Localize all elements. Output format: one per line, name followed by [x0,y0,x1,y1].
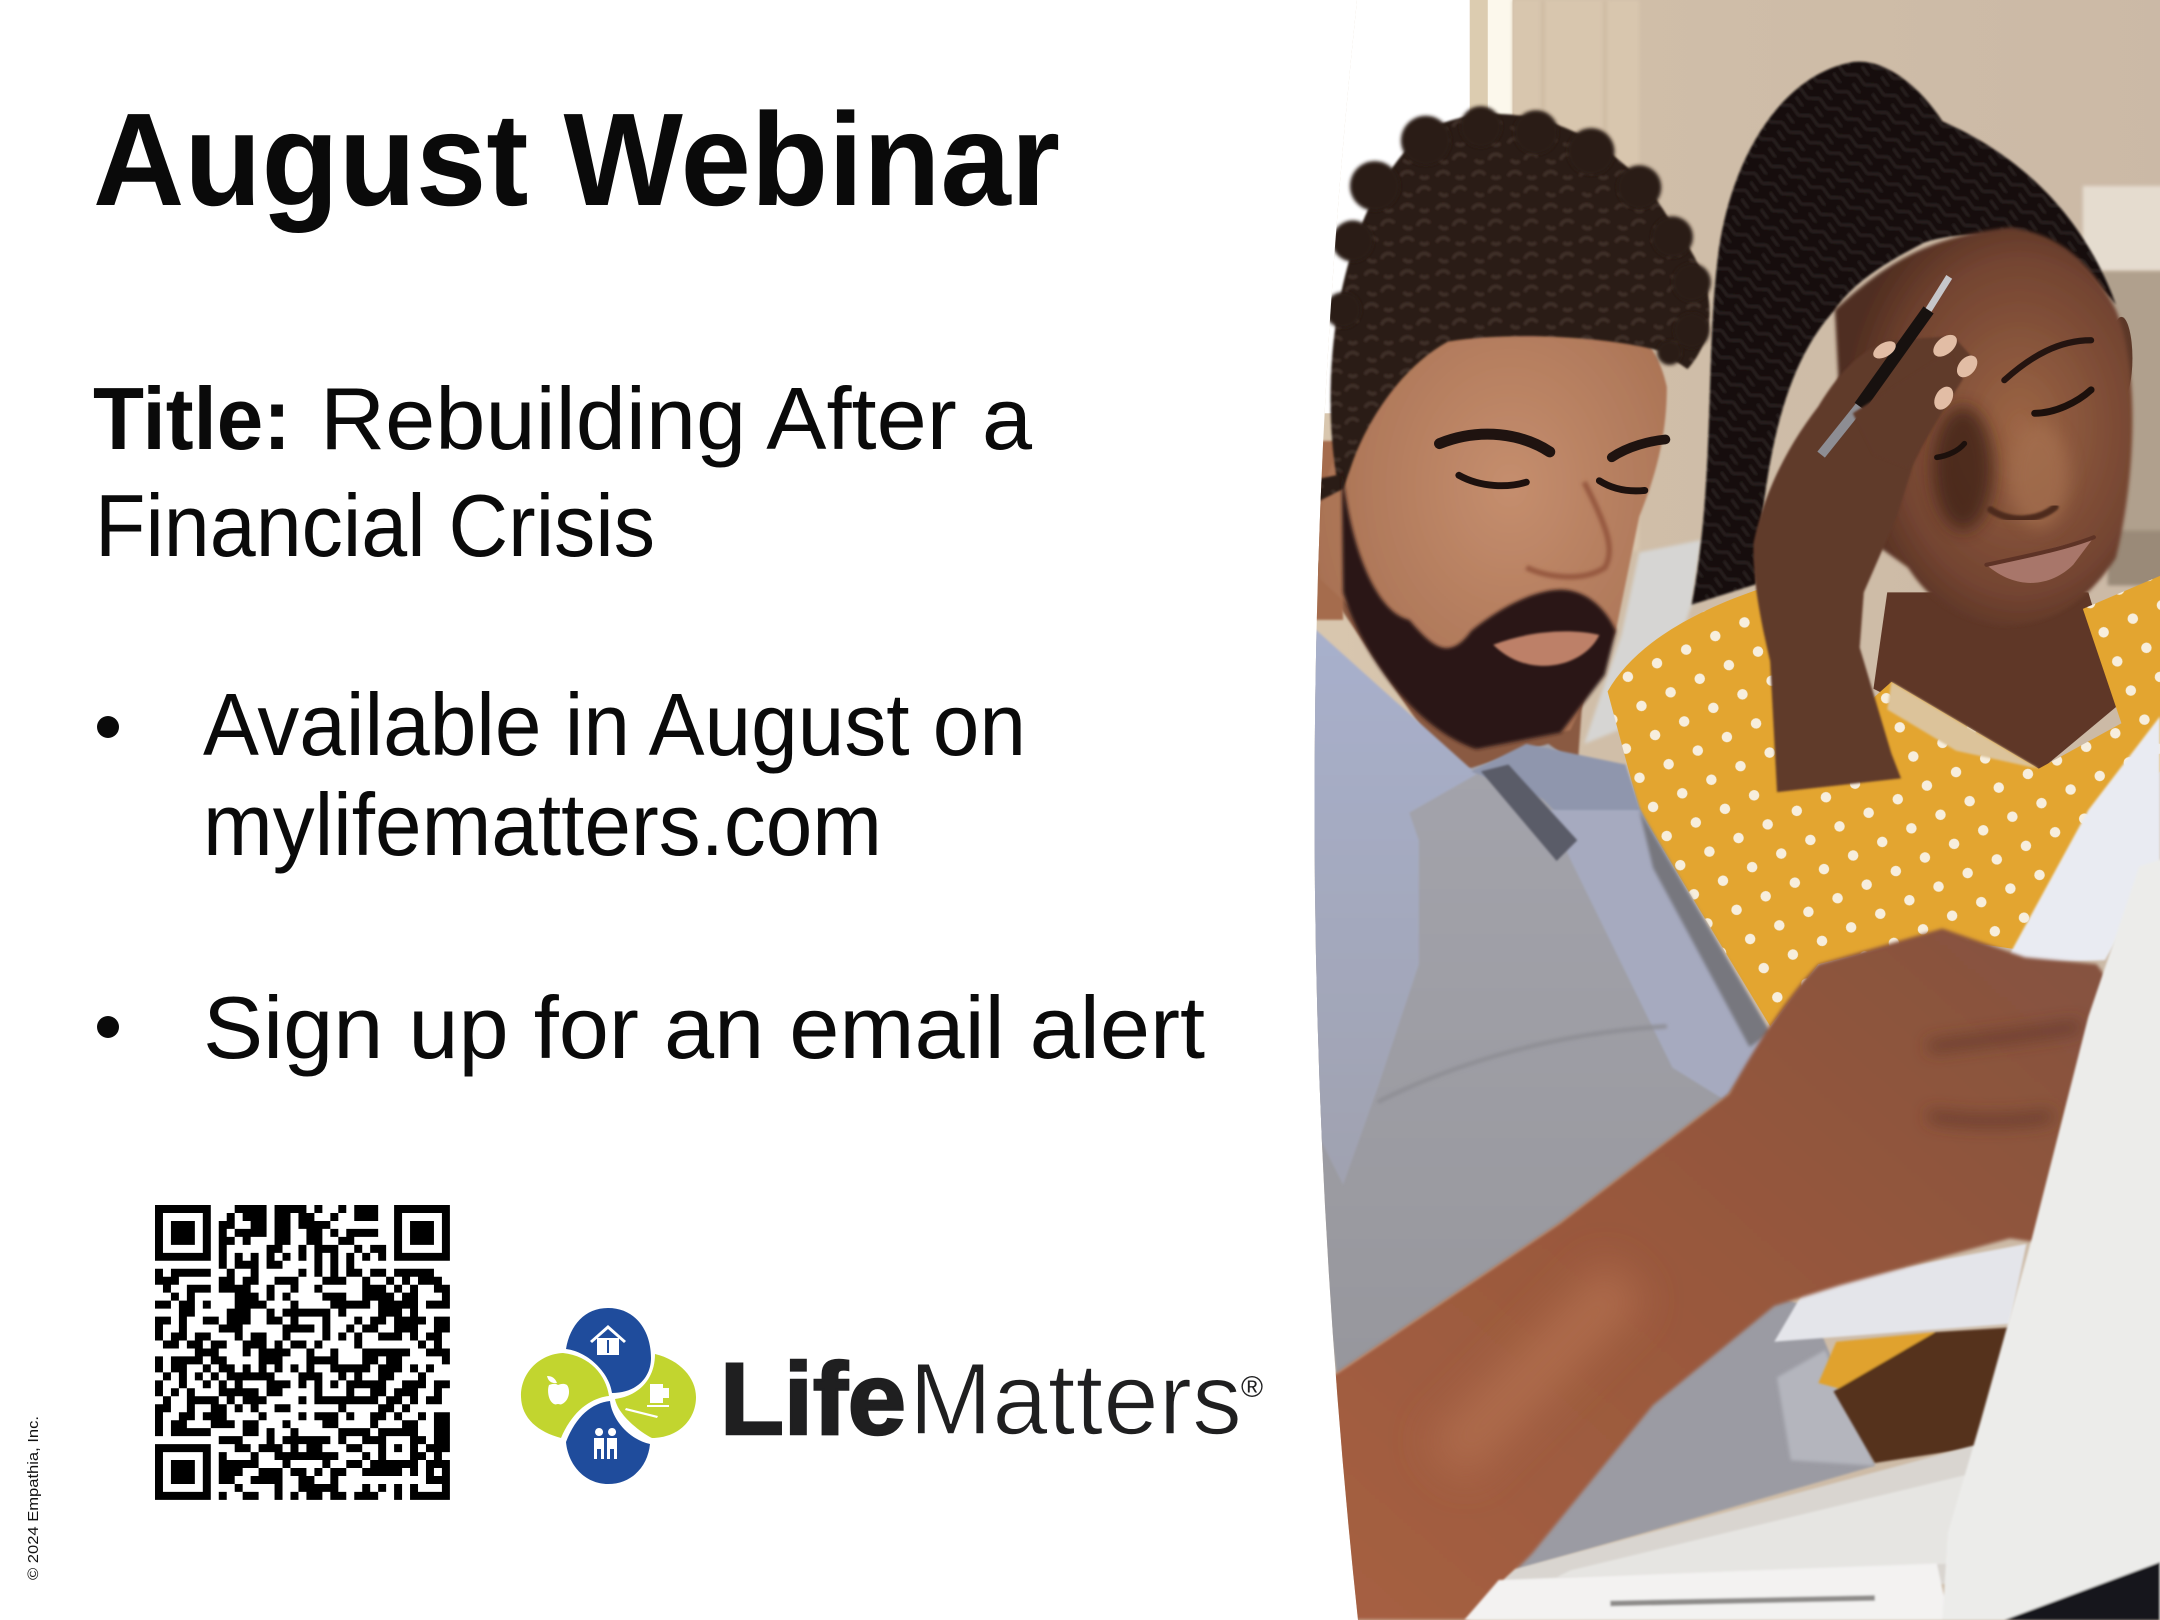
man [1302,106,1875,1570]
woman's hand [1753,336,1975,792]
man's nose shadow [1526,482,1609,577]
woman [1608,62,2160,1026]
shirt placket [1548,810,1770,1099]
logo mark: four petals [521,1308,696,1484]
upper paper [2004,716,2160,964]
logo: LifeMatters [521,1308,1263,1484]
laptop front [1464,1564,1949,1620]
title: August Webinar [93,86,1060,233]
copyright note: © 2024 Empathia, Inc. [26,1416,42,1580]
pale collar lining [1887,682,2039,769]
woman's ear [2118,316,2132,387]
shirt fold [1378,1026,1667,1102]
icon: coffee mug with saucer and pen [625,1384,669,1418]
icon: house with plant [590,1325,626,1355]
woman's face [1835,227,2132,625]
woman's braid hair [1692,62,2116,605]
logo wordmark: Matters [909,1342,1242,1456]
bullet: availability [97,675,1026,874]
QR code [147,1197,458,1508]
webinar title text: Title: [93,369,291,468]
photo: worried couple reviewing papers at a laptop [1295,0,2160,1620]
man's face [1319,310,1667,749]
arm highlight [1446,1281,1626,1460]
woman's cheek highlight [2008,423,2069,528]
man's arm and hand [1322,928,2121,1620]
bullet: availability: mylifematters.com [203,775,882,874]
man's grey shirt [1302,627,1770,1373]
man's eyes and brows [1440,434,1665,491]
man's sleeve and collar [1302,630,1477,1185]
laptop keyboard deck [1499,1445,1975,1584]
man's neck [1302,551,1584,785]
bullet: email alert: Sign up for an email alert [203,978,1205,1077]
woman's eyes, brow, nose and mouth [1937,340,2094,583]
dark corner [2004,1562,2160,1620]
logo wordmark: ® [1241,1371,1263,1404]
man's curly hair [1302,106,1711,510]
woman's eye-socket shadow [1933,406,1993,530]
icon: apple [547,1376,569,1404]
webinar title text [93,369,1032,575]
man's lips [1493,631,1599,666]
lower paper and background clothing [1774,1244,2026,1463]
webinar title text: Rebuilding After a [320,369,1032,468]
pen [1821,277,1949,455]
room background [1295,0,2160,1620]
woman's neck [1873,592,2121,771]
man's ear [1302,441,1343,620]
webinar title text: Financial Crisis [95,476,655,575]
icon: family [594,1428,617,1459]
logo wordmark [720,1342,1263,1456]
lower shirt [1515,1295,1875,1570]
bullet: availability: Available in August on [203,675,1026,774]
yellow polka dot shirt [1608,576,2160,1026]
fingers overlapping the pen [1853,351,1963,468]
finger shadows [1929,1026,2080,1121]
laptop screen [1942,854,2160,1620]
logo wordmark: Life [720,1342,906,1456]
laptop [1464,854,2160,1620]
man's beard and moustache [1342,466,1616,749]
fingernails [1870,331,1981,413]
